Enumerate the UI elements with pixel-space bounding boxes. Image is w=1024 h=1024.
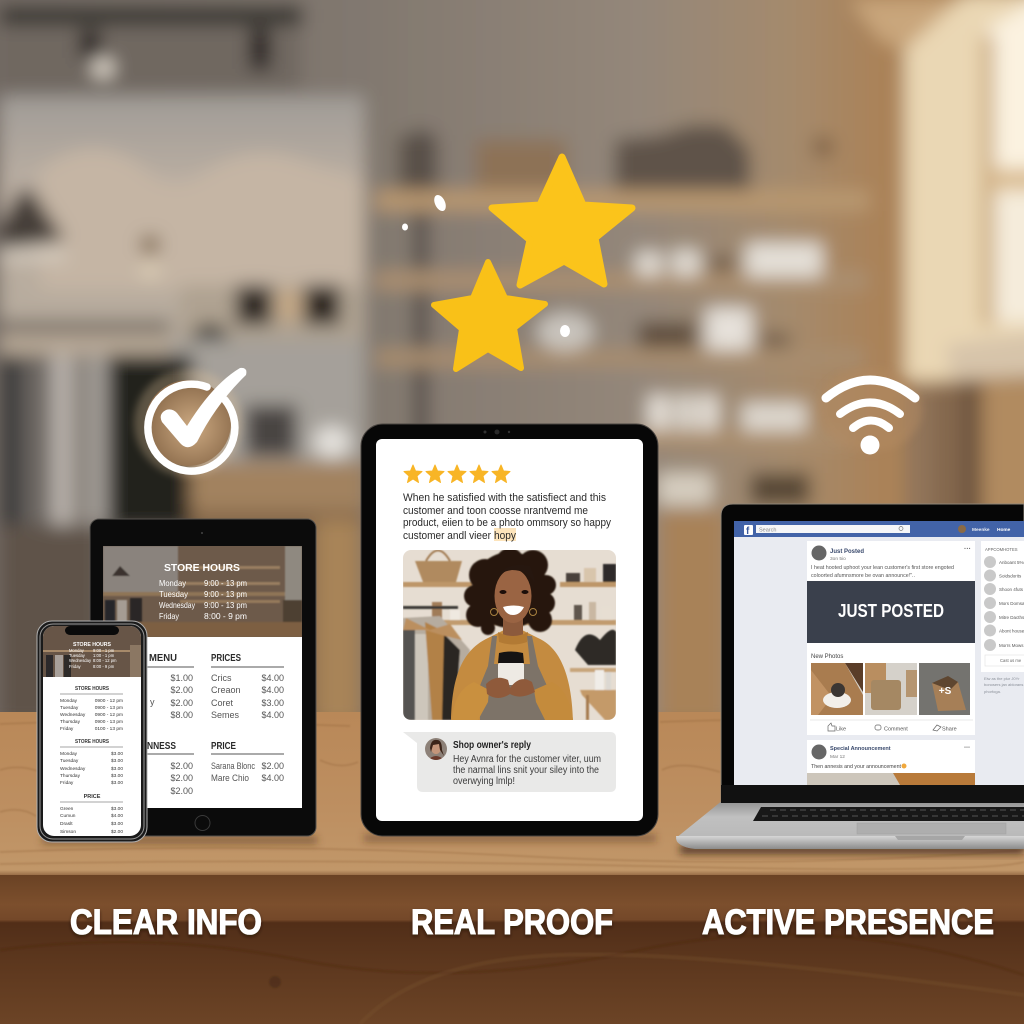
- sidebar footnote: bonosers jan ablorans: [984, 682, 1023, 687]
- wooden table top: [0, 712, 1024, 875]
- phone lists: STORE HOURS: [75, 739, 109, 745]
- post: special announcement: [807, 740, 975, 785]
- review text: customer andl vieer: [403, 530, 491, 542]
- phone lists: $3.00: [111, 751, 123, 757]
- phone: store hours: Tuesday: [69, 653, 86, 658]
- tablet price list: MENU: [149, 653, 177, 664]
- photo thumbnail: ceramics: [811, 663, 863, 715]
- phone lists: Thursday: [60, 719, 81, 725]
- sparkles: [402, 193, 570, 337]
- sidebar card: Shoon 4futs: [999, 587, 1024, 592]
- post: special announcement: Then annesis and your announcement: [811, 764, 902, 770]
- sidebar card: Mors Domsa: [999, 601, 1024, 606]
- phone: store hours: [37, 621, 147, 842]
- phone: store hours: Monday: [69, 648, 85, 653]
- phone lists: $3.00: [111, 773, 123, 779]
- phone: store hours: Friday: [69, 664, 82, 669]
- woman: [451, 548, 573, 720]
- photo: smiling shop owner with coffee: [403, 548, 616, 720]
- tablet price list: Sarana Blonc: [211, 761, 255, 771]
- floating icon: wifi: [818, 368, 922, 454]
- owner reply bubble: Hey Avnra for the customer viter, uum: [453, 754, 601, 765]
- post: just posted: ···: [964, 546, 971, 553]
- phone lists: $3.00: [111, 780, 123, 786]
- blue navigation bar: f: [746, 526, 750, 537]
- phone lists: Tuesday: [60, 705, 79, 711]
- photo thumbnail: parcel with more count: [919, 663, 970, 715]
- reply avatar: [425, 738, 447, 760]
- phone lists: 0100 - 13 pm: [95, 726, 123, 732]
- caption labels: [70, 903, 994, 942]
- post: just posted: [807, 541, 975, 735]
- phone lists: Wednesday: [60, 712, 86, 718]
- owner reply bubble: overwying lmlp!: [453, 776, 515, 787]
- tablet price list: $2.00: [170, 761, 193, 771]
- tablet price list: $3.00: [261, 698, 284, 708]
- tablet price list: $4.00: [261, 710, 284, 720]
- tablet store hours text: Monday: [159, 578, 187, 588]
- phone lists: Cumun: [60, 813, 76, 819]
- phone lists: Friday: [60, 726, 74, 732]
- phone: store hours: STORE HOURS: [73, 642, 111, 648]
- review text: product, eiien to be a photo ommsory so happy: [403, 517, 611, 529]
- sidebar card: Mitre Dacths: [999, 615, 1024, 620]
- post: just posted: Just Posted: [830, 549, 864, 555]
- photo thumbnail: cups: [865, 663, 917, 715]
- tablet price list: Semes: [211, 710, 240, 720]
- post: just posted: coloorted afumnsmore be ovan announce!"..: [811, 573, 915, 579]
- floating icon: two gold stars: [434, 157, 632, 369]
- tablet price list: $2.00: [261, 761, 284, 771]
- floating icon: check mark: [134, 368, 246, 477]
- phone lists: Tuesday: [60, 758, 79, 764]
- phone: store hours: 8:00 - 9 pm: [93, 664, 115, 669]
- phone lists: Wednesday: [60, 766, 86, 772]
- five star rating: [404, 465, 510, 482]
- tablet price list: [103, 637, 302, 808]
- owner reply bubble: Shop owner's reply: [453, 739, 531, 751]
- device shadows on table: [42, 834, 1024, 854]
- sidebar card: Cast us me: [1000, 658, 1022, 663]
- tablet price list: $2.00: [170, 786, 193, 796]
- post: just posted: I heat hooted uphoot your lean customer's first store engoted: [811, 565, 954, 571]
- blue navigation bar: [734, 521, 1024, 537]
- just posted banner: [807, 581, 975, 643]
- tablet store hours text: STORE HOURS: [164, 562, 240, 574]
- curly hair: [464, 548, 556, 635]
- wooden table front edge: [0, 875, 1024, 1024]
- post actions: Share: [942, 726, 957, 732]
- phone lists: $3.00: [111, 766, 123, 772]
- tablet price list: $2.00: [170, 773, 193, 783]
- tablet store hours text: 9:00 - 13 pm: [204, 578, 247, 588]
- phone lists: STORE HOURS: [75, 686, 109, 692]
- phone lists: Draslt: [60, 821, 73, 827]
- tablet price list: Crics: [211, 673, 232, 683]
- phone lists: Simson: [60, 829, 76, 835]
- tablet store hours text: [159, 562, 247, 621]
- phone lists: 0900 - 13 pm: [95, 719, 123, 725]
- owner reply bubble: the narmal lins snit your siley into the: [453, 765, 599, 776]
- left tablet: store hours and menu: [90, 519, 316, 836]
- hands: [486, 678, 535, 698]
- post: special announcement: Special Announcement: [830, 746, 891, 752]
- blue navigation bar: Home: [997, 527, 1011, 533]
- tablet store hours text: Wednesday: [159, 600, 196, 610]
- tablet price list: $8.00: [170, 710, 193, 720]
- sweater: [451, 630, 573, 720]
- phone lists: $2.00: [111, 829, 123, 835]
- caption: active presence: ACTIVE PRESENCE: [702, 903, 994, 942]
- tablet price list: Mare Chio: [211, 773, 249, 783]
- phone: store hours: 9:00 - 1 pm: [93, 648, 115, 653]
- phone: store hours: 1:00 - 1 pm: [93, 653, 115, 658]
- tablet header photo: [103, 546, 302, 637]
- post actions: [828, 723, 957, 732]
- tablet price list: $2.00: [170, 698, 193, 708]
- phone lists: 0900 - 12 pm: [95, 698, 123, 704]
- post: just posted: 3on 5io: [830, 556, 846, 562]
- tablet price list: NNESS: [147, 741, 176, 752]
- tablet price list: Creaon: [211, 685, 241, 695]
- post: special announcement: ---: [964, 745, 970, 751]
- sidebar card: APPCOMHOTES: [985, 547, 1018, 552]
- post actions: Like: [836, 726, 846, 732]
- phone lists: Thursday: [60, 773, 81, 779]
- blue navigation bar: Meenke: [972, 527, 990, 533]
- background: blurred shop interior: [0, 0, 1024, 725]
- phone lists: [60, 686, 123, 835]
- phone lists: 0900 - 13 pm: [95, 705, 123, 711]
- post actions: Comment: [884, 726, 908, 732]
- sidebar card: Morrs Mows: [999, 643, 1024, 648]
- tablet price list: $4.00: [261, 673, 284, 683]
- phone lists: $4.00: [111, 813, 123, 819]
- coffee cup: [498, 663, 524, 685]
- tablet price list: $4.00: [261, 685, 284, 695]
- phone lists: Friday: [60, 780, 74, 786]
- tablet store hours text: Tuesday: [159, 589, 189, 599]
- phone lists: Monday: [60, 751, 78, 757]
- sidebar footnote: Eiw as the plur J0Yr: [984, 676, 1020, 681]
- just posted banner: JUST POSTED: [838, 601, 944, 621]
- review text: When he satisfied with the satisfiect and this: [403, 492, 606, 504]
- phone: store hours: 8:00 - 12 pm: [93, 658, 117, 663]
- sidebar card: Abont house: [999, 628, 1024, 634]
- phone lists: $3.00: [111, 806, 123, 812]
- tablet price list: $1.00: [170, 673, 193, 683]
- sidebar footnote: [984, 676, 1023, 694]
- tablet store hours text: 9:00 - 13 pm: [204, 600, 247, 610]
- phone: store hours: Wednesday: [69, 658, 92, 663]
- phone header photo: [43, 626, 141, 677]
- phone lists: 0900 - 12 pm: [95, 712, 123, 718]
- caption: clear info: CLEAR INFO: [70, 903, 262, 942]
- tablet store hours text: Friday: [159, 611, 180, 621]
- photo thumbnail: parcel with more count: +S: [939, 686, 952, 697]
- phone lists: Monday: [60, 698, 78, 704]
- review text: customer and toon coosse nrantvemd me: [403, 505, 588, 517]
- tablet price list: PRICES: [211, 653, 241, 664]
- phone lists: $3.00: [111, 758, 123, 764]
- sidebar footnote: phorfoga.: [984, 689, 1001, 694]
- apron: [479, 636, 548, 720]
- tablet store hours text: 9:00 - 13 pm: [204, 589, 247, 599]
- phone lists: PRICE: [84, 794, 101, 800]
- owner reply bubble: [403, 732, 616, 792]
- laptop base and keyboard: [676, 800, 1024, 849]
- post: special announcement: Mar 12: [830, 754, 845, 760]
- review text: hopy: [494, 530, 516, 542]
- tablet price list: $4.00: [261, 773, 284, 783]
- tablet price list: PRICE: [211, 741, 236, 752]
- caption: real proof: REAL PROOF: [411, 903, 613, 942]
- center tablet: review card: [361, 424, 658, 836]
- blue navigation bar: Search: [759, 528, 776, 534]
- tablet price list: $2.00: [170, 685, 193, 695]
- laptop with social feed: [676, 504, 1024, 849]
- tablet store hours text: 8:00 - 9 pm: [204, 611, 247, 621]
- sidebar card: Soidsdorits: [999, 574, 1022, 578]
- tablet price list: y: [150, 697, 155, 707]
- sidebar card: [981, 541, 1024, 672]
- phone lists: Green: [60, 806, 74, 812]
- review text: [403, 492, 611, 542]
- post: just posted: New Photos: [811, 654, 843, 660]
- phone lists: $3.00: [111, 821, 123, 827]
- tablet price list: Coret: [211, 698, 234, 708]
